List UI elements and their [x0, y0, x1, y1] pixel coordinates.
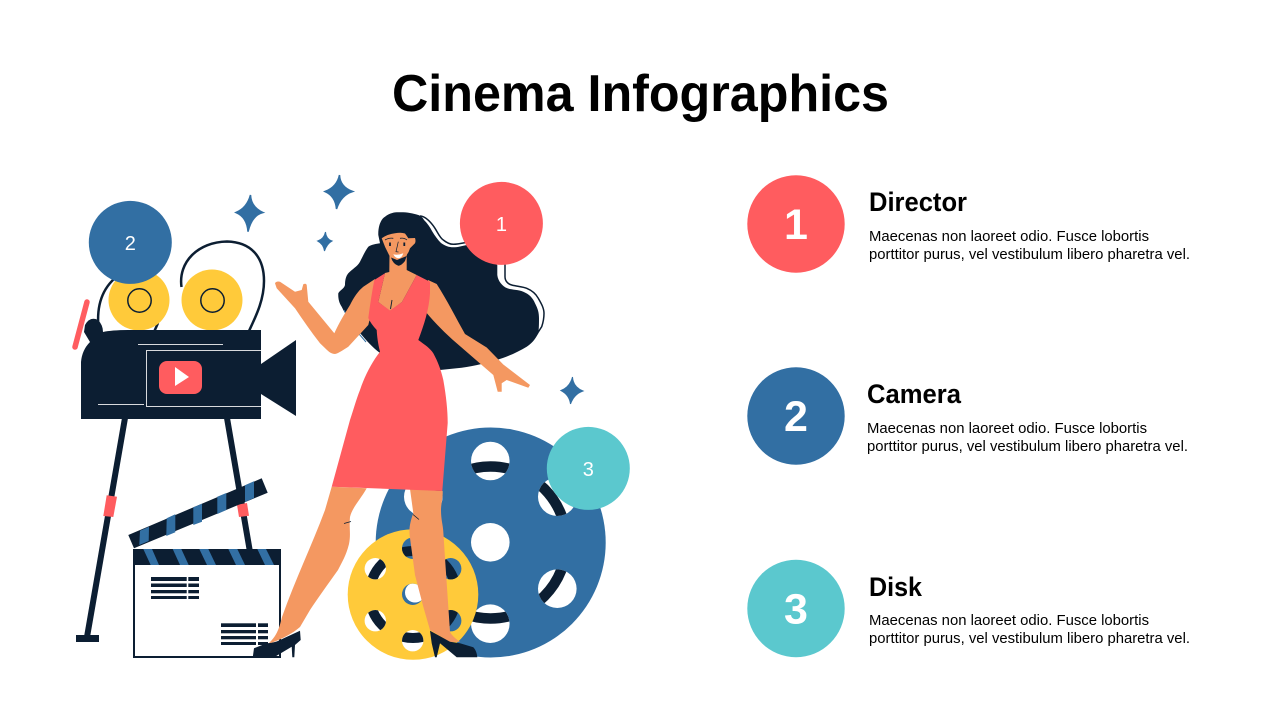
heading: disk: Disk: [869, 572, 923, 602]
camera on tripod: [75, 242, 296, 642]
text block: director: Maecenas non laoreet odio. Fusce lobortis: [869, 228, 1149, 245]
knee lines: [344, 514, 419, 524]
marker 2: [89, 201, 172, 284]
text block: director: [869, 228, 1190, 263]
number badge 2: 2: [784, 393, 808, 441]
icon: play button: [159, 361, 202, 394]
text block: camera: Maecenas non laoreet odio. Fusce lobortis: [867, 420, 1147, 437]
shoes: [253, 631, 477, 658]
left leg: [268, 487, 367, 644]
title: Cinema Infographics: [392, 65, 889, 123]
number badge 1: [747, 175, 845, 273]
clapperboard: [128, 478, 281, 657]
number badge 2: [747, 367, 845, 465]
text block: disk: [869, 612, 1190, 647]
right leg: [409, 489, 460, 642]
yellow film reel: [348, 529, 478, 660]
left arm: [275, 279, 375, 354]
heading: director: Director: [869, 187, 967, 217]
text block: disk: Maecenas non laoreet odio. Fusce lobortis: [869, 612, 1149, 629]
film loops: [98, 242, 264, 332]
heading: camera: Camera: [867, 379, 962, 409]
neck and chest: [378, 254, 417, 311]
number badge 3: [747, 560, 845, 657]
blue film reel: [376, 428, 606, 658]
illustration: cinema scene: [75, 175, 630, 660]
marker 1: 1: [496, 214, 507, 236]
clapper board: [133, 549, 281, 657]
number badge 3: 3: [784, 586, 808, 634]
marker 2: 2: [125, 233, 136, 255]
dress: [332, 273, 448, 491]
text block: camera: porttitor purus, vel vestibulum libero pharetra vel.: [867, 438, 1188, 455]
icon: sparkle stars: [236, 175, 583, 404]
text block: disk: porttitor purus, vel vestibulum libero pharetra vel.: [869, 630, 1190, 647]
marker 1: [460, 182, 543, 265]
panel: disk: [747, 560, 1190, 657]
cleavage line: [390, 300, 392, 309]
marker 3: 3: [583, 459, 594, 481]
tripod legs: [76, 418, 250, 642]
right arm: [427, 280, 530, 392]
text block: camera: [867, 420, 1188, 455]
red handle: [75, 302, 87, 347]
clapper arm: [128, 478, 268, 548]
panel: director: [747, 175, 1190, 273]
camera reels: [108, 270, 242, 330]
face: [382, 233, 416, 266]
camera detail lines: [98, 344, 261, 406]
panel: camera: [747, 367, 1188, 465]
camera body: [81, 319, 296, 419]
marker 3: [547, 427, 630, 510]
woman presenter: [253, 212, 544, 658]
text block: director: porttitor purus, vel vestibulum libero pharetra vel.: [869, 246, 1190, 263]
number badge 1: 1: [784, 201, 808, 249]
hair: [338, 212, 544, 370]
